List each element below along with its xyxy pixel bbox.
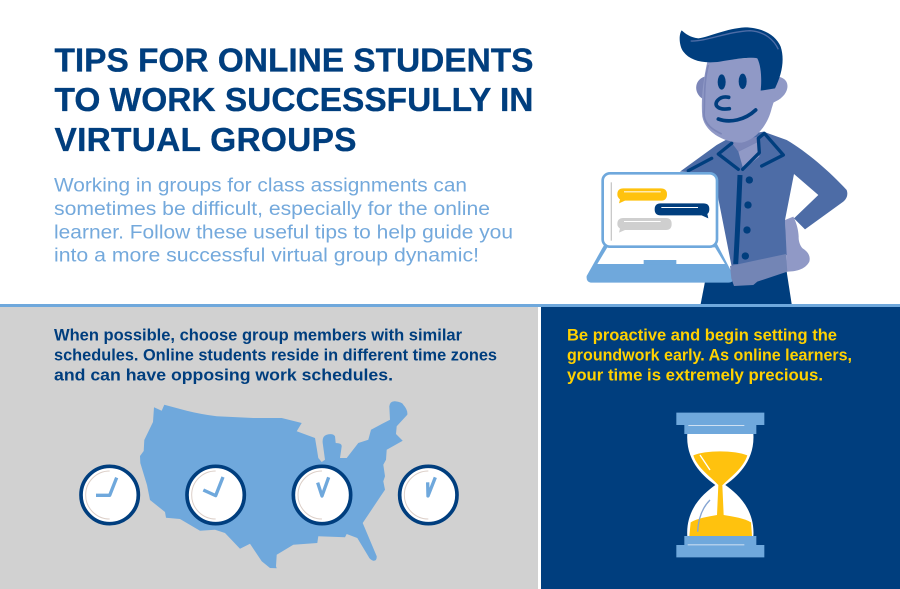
navy chat bubble [655, 203, 709, 218]
grey chat bubble [617, 218, 672, 233]
left panel text [54, 326, 497, 384]
intro text: Working in groups for class assignments can [54, 176, 467, 197]
panel: be proactive [541, 306, 900, 589]
hourglass icon [676, 413, 764, 557]
shirt and arm [680, 132, 847, 267]
glass highlights [700, 455, 710, 470]
laptop base [587, 243, 734, 283]
clock 3 [293, 466, 351, 524]
face [702, 57, 777, 143]
top cap [676, 413, 764, 434]
right panel text: groundwork early. As online learners, [567, 346, 852, 364]
clock 2 [187, 466, 244, 524]
back hand at hip [785, 217, 810, 272]
clock 4 [400, 466, 457, 524]
trousers [701, 272, 792, 304]
neck [738, 142, 759, 169]
right panel text: Be proactive and begin setting the [567, 326, 837, 344]
laptop [587, 173, 734, 283]
title: TIPS FOR ONLINE STUDENTS [54, 43, 534, 80]
eyes [718, 74, 726, 90]
right panel text [567, 326, 852, 384]
man's head [680, 27, 787, 143]
man's body [680, 132, 847, 304]
title: TO WORK SUCCESSFULLY IN [54, 82, 534, 119]
ears [696, 77, 705, 100]
right panel text: your time is extremely precious. [567, 366, 823, 384]
glass [687, 433, 753, 537]
map of the United States [140, 401, 407, 568]
panel: group members [0, 306, 538, 589]
illustration: man holding laptop [587, 27, 847, 304]
sand stream and bottom [689, 485, 752, 536]
left panel text: When possible, choose group members with similar [54, 326, 463, 344]
divider band [0, 304, 900, 307]
buttons [742, 176, 753, 260]
map and clocks [81, 401, 457, 568]
title [54, 43, 534, 159]
collar [688, 133, 783, 171]
placket [736, 175, 740, 264]
laptop screen [603, 173, 717, 247]
panel gap [538, 307, 541, 589]
intro text: sometimes be difficult, especially for the online [54, 199, 490, 220]
left panel text: and can have opposing work schedules. [54, 366, 393, 384]
intro text: into a more successful virtual group dynamic! [54, 246, 479, 267]
sand top [693, 451, 747, 485]
belt and front hand [730, 254, 787, 286]
left panel text: schedules. Online students reside in different time zones [54, 346, 497, 364]
intro text: learner. Follow these useful tips to help guide you [54, 222, 513, 243]
yellow chat bubble [617, 188, 667, 203]
hair highlight [691, 31, 778, 49]
cheek line [704, 65, 722, 134]
nose and smile [716, 97, 756, 121]
intro text [54, 176, 513, 267]
hair [680, 27, 783, 91]
title: VIRTUAL GROUPS [54, 122, 356, 159]
bottom cap [676, 536, 764, 557]
clock 1 [81, 466, 138, 524]
